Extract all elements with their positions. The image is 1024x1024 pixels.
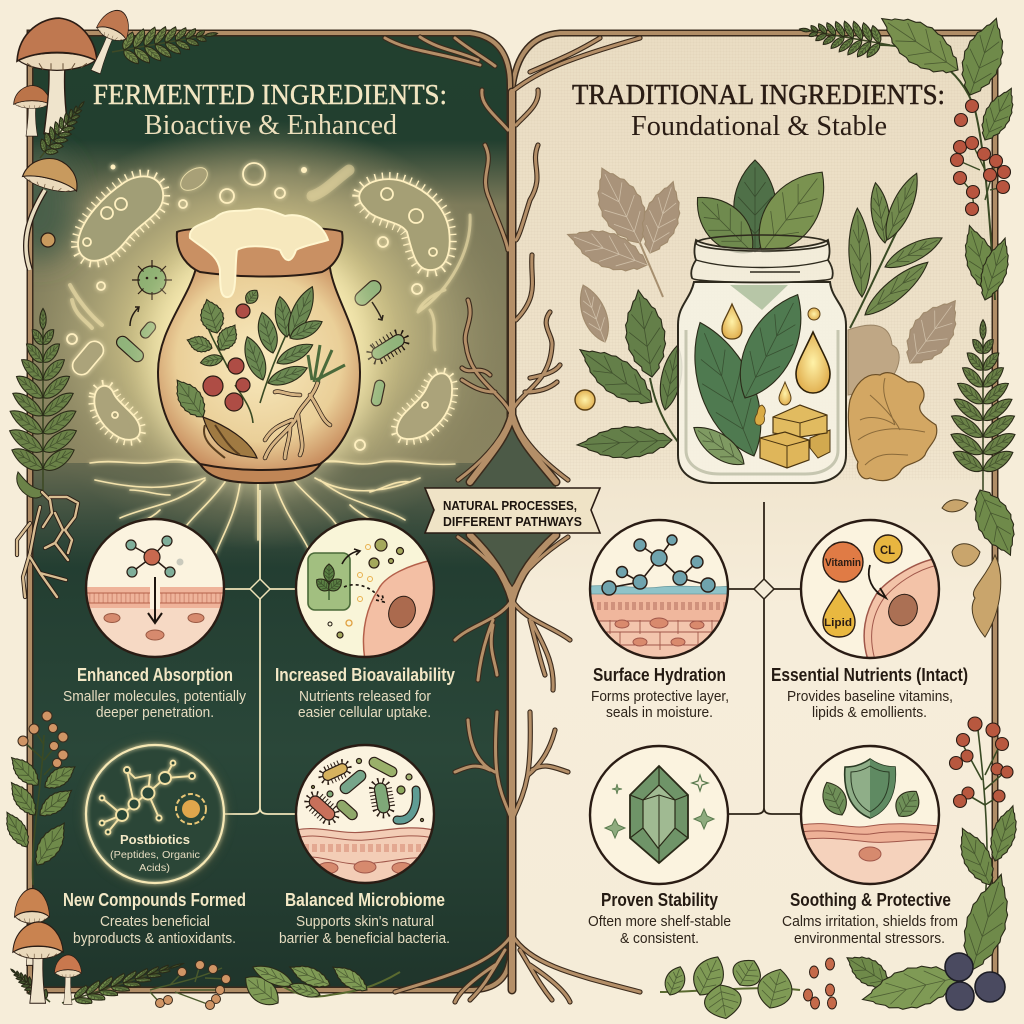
circle: increased bioavailability bbox=[296, 519, 440, 660]
central tree divider bbox=[385, 37, 640, 1002]
text: balanced microbiome: barrier & beneficial bacteria. bbox=[279, 930, 450, 947]
small green bacteria and arrows bbox=[114, 260, 406, 407]
text: enhanced absorption: Enhanced Absorption bbox=[77, 665, 233, 685]
text: increased bioavailability: Nutrients released for bbox=[299, 688, 431, 705]
text: balanced microbiome bbox=[279, 890, 450, 947]
green sprig right of the jar bbox=[847, 169, 946, 328]
central sprig bbox=[272, 295, 295, 338]
jar neck and lid rings bbox=[691, 240, 833, 282]
text: enhanced absorption: deeper penetration. bbox=[96, 704, 214, 721]
decoration: bottom-right leaves, berries and blueberries bbox=[660, 869, 1020, 1022]
text: proven stability: Proven Stability bbox=[601, 890, 718, 910]
decoration: top-left mushrooms and fern bbox=[14, 5, 221, 270]
central banner: NATURAL PROCESSES, bbox=[443, 498, 577, 513]
text: essential nutrients: lipids & emollients. bbox=[812, 704, 927, 721]
decoration: bottom-left mushrooms and herbs bbox=[6, 888, 187, 1013]
leaves inside the jar bbox=[676, 313, 778, 466]
leaves rising out of the jar bbox=[734, 160, 776, 252]
text: enhanced absorption bbox=[63, 665, 246, 721]
panel: traditional ingredients background bbox=[512, 33, 995, 990]
text: surface hydration bbox=[591, 665, 729, 721]
dried leaf prints, right panel bbox=[561, 158, 972, 375]
circle: enhanced absorption bbox=[84, 518, 226, 658]
text: balanced microbiome: Balanced Microbiome bbox=[285, 890, 445, 910]
butter cubes bbox=[810, 430, 830, 458]
decoration: bottom-left berries and leaves bbox=[150, 959, 400, 1012]
circle: essential nutrients bbox=[801, 520, 945, 660]
leaves left of the jar bbox=[570, 287, 687, 461]
text: proven stability bbox=[588, 890, 731, 947]
text: soothing and protective: environmental stressors. bbox=[794, 930, 945, 947]
circle: proven stability bbox=[590, 746, 728, 884]
fermentation pot bbox=[148, 209, 372, 488]
text: soothing and protective bbox=[782, 890, 958, 947]
oil drops bbox=[722, 304, 742, 339]
berries bbox=[236, 304, 250, 318]
glowing roots under the pot bbox=[90, 460, 455, 555]
text: essential nutrients bbox=[771, 665, 968, 721]
text: enhanced absorption: Smaller molecules, potentially bbox=[63, 688, 246, 705]
pot body bbox=[197, 458, 324, 483]
decoration: right fern and dried leaves bbox=[942, 320, 1024, 637]
heading: fermented ingredients bbox=[93, 80, 447, 141]
heading: traditional ingredients: TRADITIONAL INGREDIENTS: bbox=[572, 80, 945, 111]
roots inside the pot bbox=[168, 374, 212, 424]
text: proven stability: Often more shelf-stable bbox=[588, 913, 731, 930]
postbiotic molecule bbox=[100, 761, 195, 834]
foam bbox=[190, 209, 328, 297]
text: new compounds formed: Creates beneficial bbox=[100, 913, 210, 930]
circle: new compounds / postbiotics: Acids) bbox=[139, 862, 170, 874]
circle: surface hydration bbox=[590, 520, 730, 660]
glass jar bbox=[676, 157, 846, 483]
text: new compounds formed: byproducts & antioxidants. bbox=[73, 930, 236, 947]
circle: essential nutrients: Vitamin bbox=[825, 557, 861, 569]
jar body bbox=[678, 282, 846, 483]
text: soothing and protective: Calms irritation, shields from bbox=[782, 913, 958, 930]
text: surface hydration: seals in moisture. bbox=[606, 704, 713, 721]
connector lines, traditional side bbox=[728, 502, 801, 814]
heading: fermented ingredients: FERMENTED INGREDIENTS: bbox=[93, 80, 447, 111]
circle: soothing and protective bbox=[800, 746, 940, 885]
circle: essential nutrients: Lipid bbox=[824, 617, 852, 629]
circle: new compounds / postbiotics: Postbiotics bbox=[120, 833, 190, 847]
text: surface hydration: Surface Hydration bbox=[593, 665, 726, 685]
left herb in the pot bbox=[207, 287, 312, 423]
decoration: right berry sprig bbox=[950, 717, 1024, 900]
text: increased bioavailability: easier cellular uptake. bbox=[298, 704, 431, 721]
decoration: left fern and roots bbox=[8, 308, 78, 597]
circle: essential nutrients: CL bbox=[880, 543, 895, 557]
text: increased bioavailability bbox=[275, 665, 455, 721]
circle: new compounds / postbiotics: (Peptides, Organic bbox=[110, 849, 200, 861]
text: soothing and protective: Soothing & Protective bbox=[790, 890, 951, 910]
text: new compounds formed: New Compounds Formed bbox=[63, 890, 246, 910]
text: new compounds formed bbox=[63, 890, 246, 947]
text: balanced microbiome: Supports skin's natural bbox=[296, 913, 434, 930]
heading: fermented ingredients: Bioactive & Enhanced bbox=[144, 110, 397, 141]
panel: fermented ingredients background bbox=[4, 33, 517, 990]
central banner: DIFFERENT PATHWAYS bbox=[443, 514, 582, 529]
decoration: top-right leaves and berries bbox=[796, 2, 1023, 304]
heading: traditional ingredients: Foundational & Stable bbox=[631, 111, 887, 142]
heading: traditional ingredients bbox=[572, 80, 945, 142]
text: essential nutrients: Provides baseline vitamins, bbox=[787, 688, 953, 705]
text: essential nutrients: Essential Nutrients (Intact) bbox=[771, 665, 968, 685]
decoration: left berry sprig bbox=[0, 711, 80, 885]
glowing microbes around the pot bbox=[67, 163, 470, 450]
central banner bbox=[425, 488, 600, 533]
gold bead bbox=[575, 390, 595, 410]
text: increased bioavailability: Increased Bioavailability bbox=[275, 665, 455, 685]
connector lines, fermented side bbox=[224, 490, 296, 814]
circle: balanced microbiome bbox=[296, 745, 434, 884]
ginger root and golden dried leaf bbox=[848, 325, 937, 481]
text: surface hydration: Forms protective layer, bbox=[591, 688, 729, 705]
circle: new compounds / postbiotics bbox=[83, 742, 227, 886]
text: proven stability: & consistent. bbox=[620, 930, 699, 947]
